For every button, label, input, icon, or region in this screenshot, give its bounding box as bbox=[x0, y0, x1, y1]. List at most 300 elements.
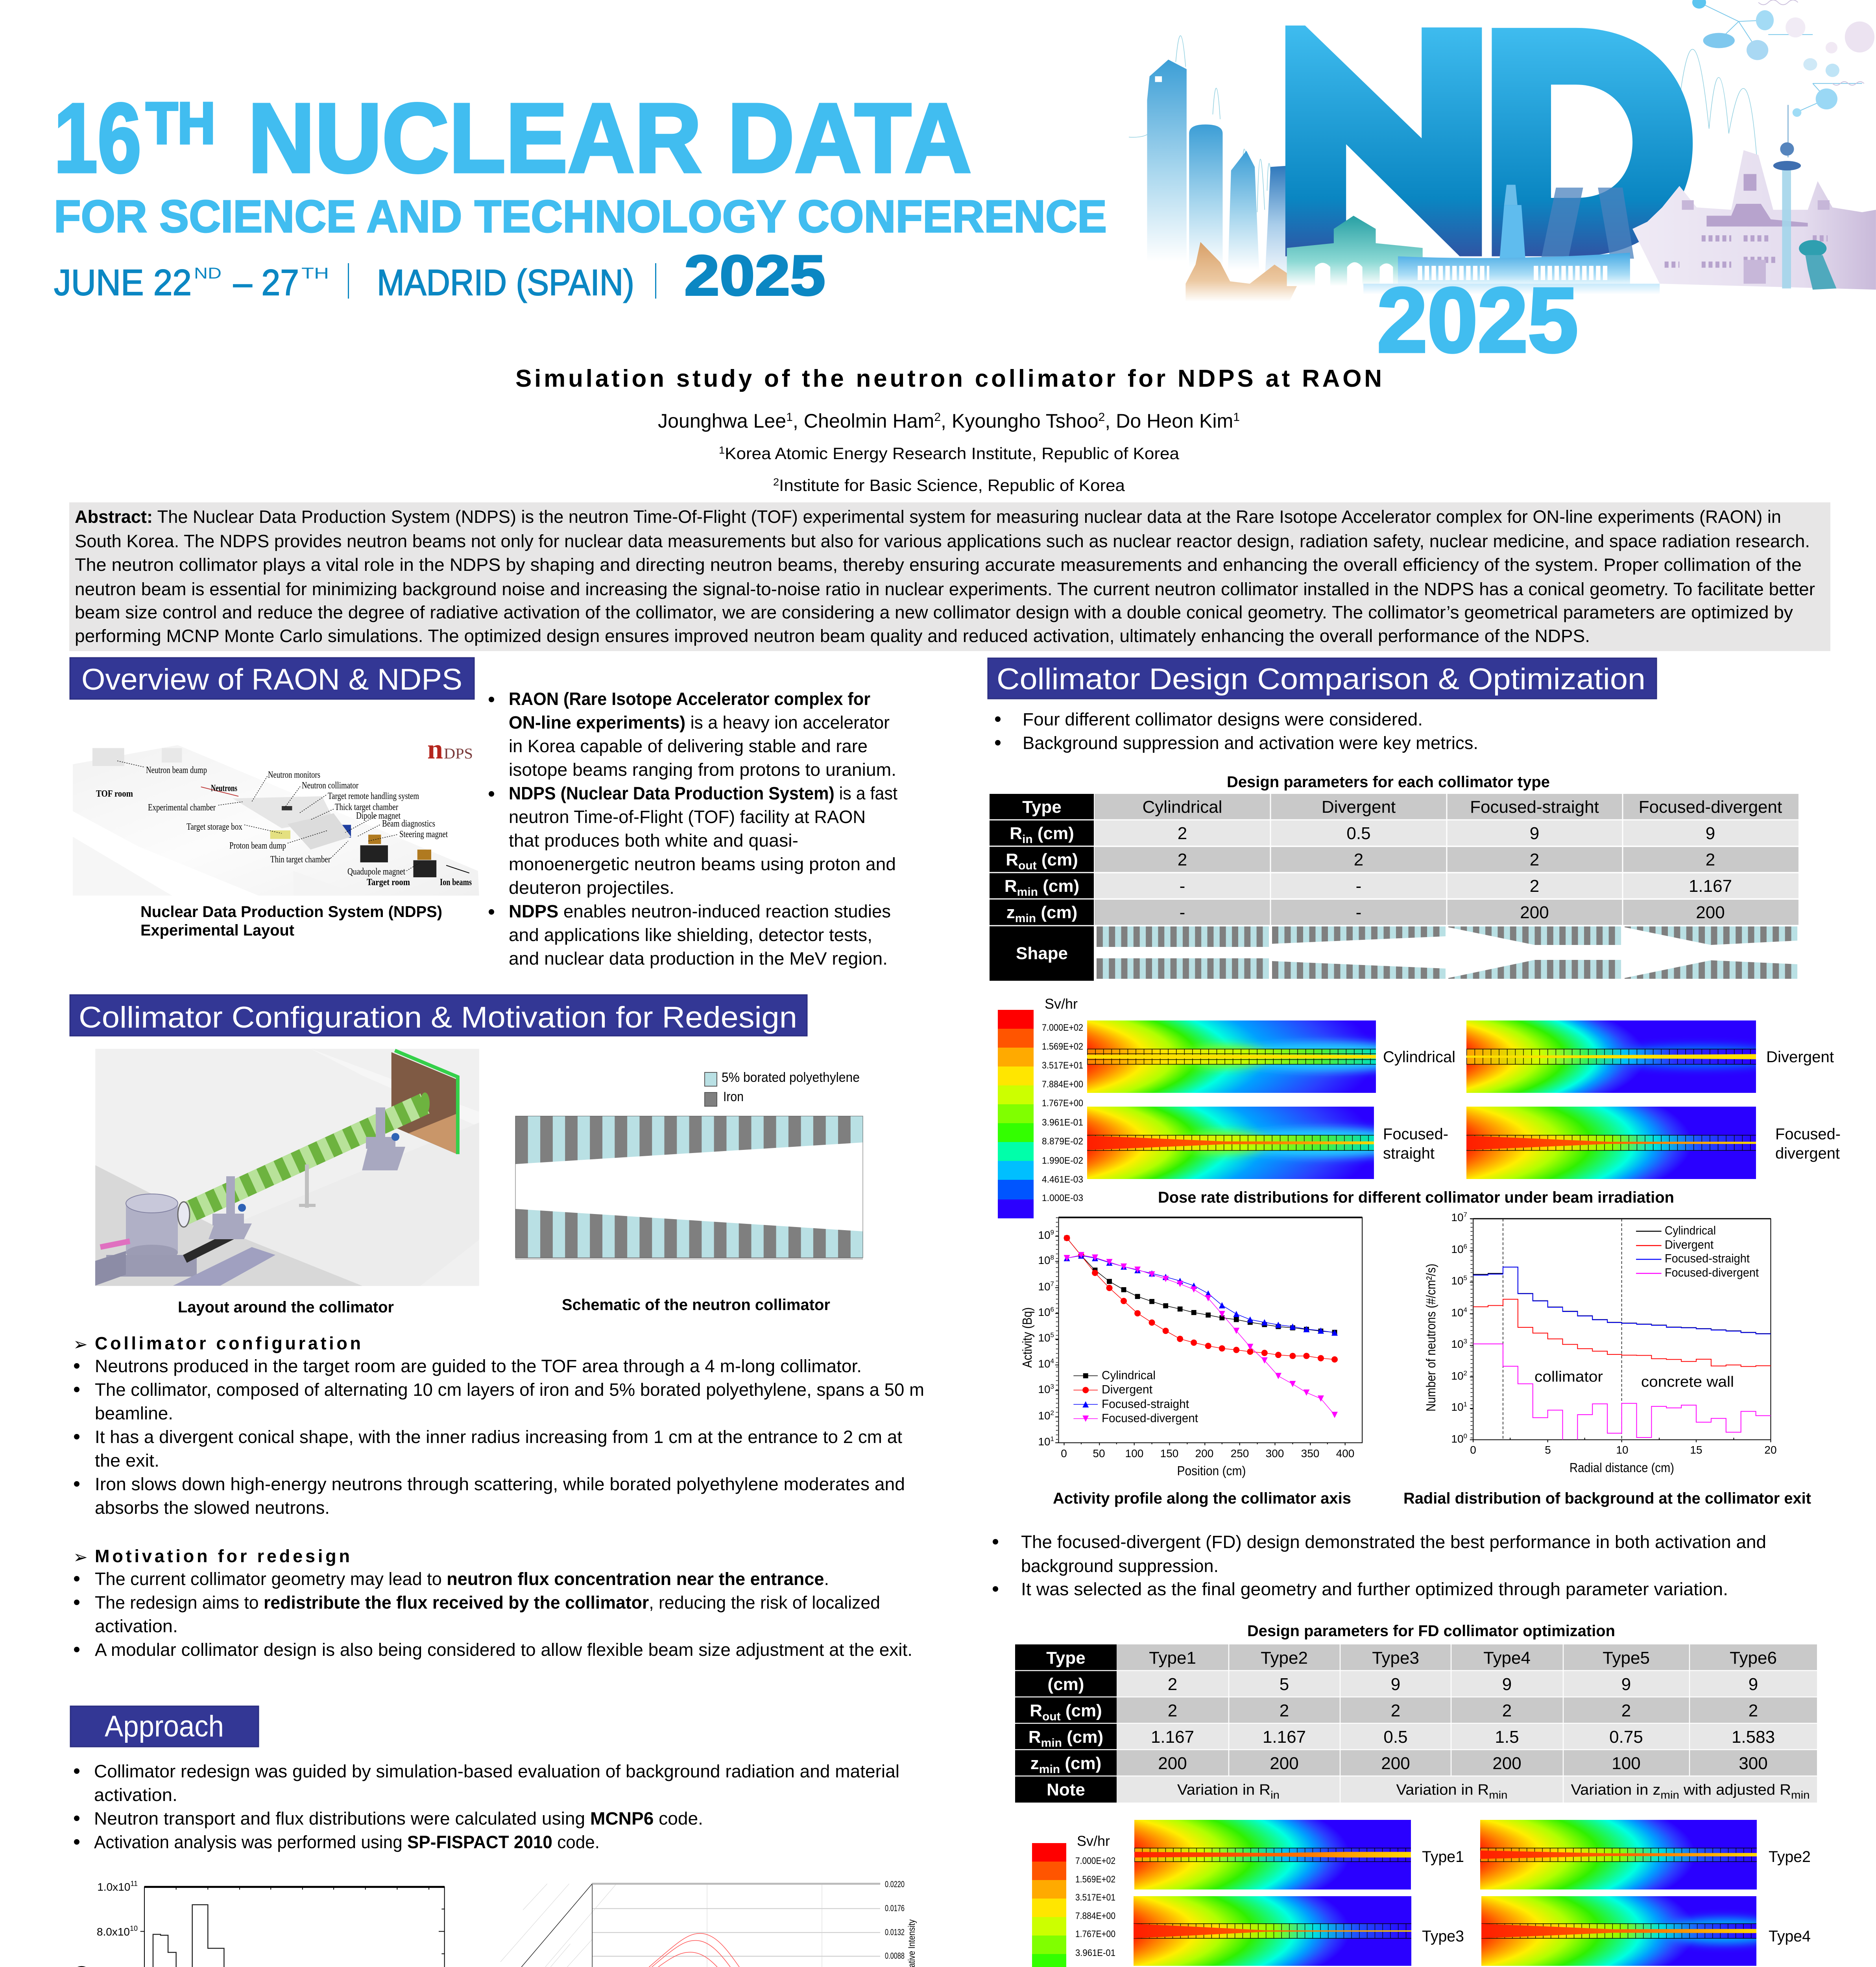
legend and axis labels: Activity (Bq) bbox=[1020, 1307, 1034, 1368]
table: design parameters for each collimator type: 9 bbox=[1706, 824, 1715, 843]
table: design parameters for each collimator type: Focused-straight bbox=[1470, 797, 1599, 817]
authors: 2 bbox=[1099, 411, 1105, 424]
legend and axis labels: Cylindrical bbox=[1102, 1368, 1156, 1382]
text block: RAON and NDPS bullets: deuteron projectiles. bbox=[509, 878, 674, 898]
figure: NDPS experimental layout: Proton beam dump bbox=[229, 841, 286, 851]
legend and axis labels bbox=[1424, 1211, 1777, 1475]
table: design parameters for FD collimator optimization: 1.583 bbox=[1732, 1727, 1775, 1747]
color scale: dose rate 1: 7.000E+02 bbox=[1042, 1022, 1083, 1033]
legend and axis labels: Divergent bbox=[1665, 1238, 1714, 1251]
legend and axis labels: 10 bbox=[1038, 1383, 1051, 1395]
text block: collimator configuration: absorbs the slowed neutrons. bbox=[95, 1498, 330, 1518]
icon: Torrespana tower bbox=[1773, 105, 1801, 288]
subheading: collimator configuration: ➢ bbox=[73, 1334, 88, 1354]
label: focused-straight bbox=[1383, 1126, 1448, 1162]
table: design parameters for FD collimator optimization: 2 bbox=[1391, 1701, 1400, 1720]
table: design parameters for FD collimator optimization: 300 bbox=[1739, 1754, 1768, 1773]
caption: dose rate 1: Dose rate distributions for different collimator under beam irradiation bbox=[1158, 1189, 1674, 1206]
table: design parameters for FD collimator optimization: (cm) bbox=[1061, 1701, 1102, 1720]
text block: RAON and NDPS bullets: that produces both white and quasi- bbox=[509, 830, 798, 851]
text block: motivation for redesign: activation. bbox=[95, 1616, 178, 1636]
legend and axis labels: 50 bbox=[1093, 1447, 1105, 1460]
text block: motivation for redesign bbox=[73, 1546, 912, 1660]
subheading: collimator configuration: Collimator configuration bbox=[95, 1333, 361, 1353]
caption: NDPS layout bbox=[140, 903, 442, 939]
legend and axis labels: 0 bbox=[1470, 1444, 1476, 1456]
legend and axis labels: 10 bbox=[1038, 1254, 1051, 1266]
table: design parameters for FD collimator optimization: Variation in z bbox=[1571, 1782, 1656, 1798]
legend and axis labels: 10 bbox=[1451, 1433, 1464, 1445]
table: design parameters for FD collimator optimization: min bbox=[1039, 1763, 1060, 1776]
axis labels: 0.0176 bbox=[885, 1903, 905, 1913]
table: design parameters for FD collimator optimization: Type3 bbox=[1372, 1648, 1419, 1668]
legend and axis labels: 7 bbox=[1051, 1280, 1054, 1288]
color scale: dose rate 1: 1.000E-03 bbox=[1042, 1193, 1083, 1203]
legend and axis labels: 3 bbox=[1051, 1383, 1054, 1390]
text block: focused-divergent selection bullets: The focused-divergent (FD) design demonstrated the best performance in both activation and bbox=[1021, 1532, 1766, 1552]
table: design parameters for FD collimator optimization: in bbox=[1270, 1789, 1280, 1801]
legend and axis labels: 0 bbox=[1464, 1432, 1467, 1440]
legend and axis labels: 4 bbox=[1051, 1357, 1054, 1365]
table: design parameters for each collimator type: min bbox=[1017, 886, 1038, 899]
table: design parameters for FD collimator optimization: min bbox=[1791, 1789, 1810, 1801]
table: design parameters for each collimator type: Shape bbox=[1016, 944, 1068, 963]
text block: RAON and NDPS bullets: RAON (Rare Isotope Accelerator complex for bbox=[509, 689, 870, 709]
text block: RAON and NDPS bullets: NDPS (Nuclear Data Production System) is a fast bbox=[509, 783, 897, 803]
heatmap: type 1 bbox=[1134, 1820, 1411, 1890]
legend and axis labels: 10 bbox=[1038, 1358, 1051, 1370]
label: focused-straight: Focused- bbox=[1383, 1126, 1448, 1143]
icon: Cibeles fountain sculpture bbox=[1185, 242, 1299, 302]
legend and axis labels bbox=[1020, 1229, 1354, 1478]
color scale: dose rate 2: 1.569E+02 bbox=[1075, 1874, 1115, 1885]
conference title line 1: NUCLEAR DATA bbox=[248, 83, 971, 193]
affiliation 1: Korea Atomic Energy Research Institute, Republic of Korea bbox=[725, 444, 1180, 463]
text block: motivation for redesign: The redesign aims to redistribute the flux received by the collimator, reducing the risk of localized bbox=[95, 1592, 880, 1613]
chart: angular distribution of the neutron intensity bbox=[73, 1880, 445, 1967]
table: design parameters for FD collimator optimization bbox=[1015, 1644, 1817, 1803]
legend and axis labels: 10 bbox=[1451, 1211, 1464, 1223]
table: design parameters for FD collimator optimization: with adjusted R bbox=[1679, 1782, 1791, 1798]
table: design parameters for FD collimator optimization: 0.75 bbox=[1609, 1727, 1643, 1747]
caption: radial distribution 1: Radial distribution of background at the collimator exit bbox=[1403, 1490, 1811, 1507]
text block: collimator configuration: Iron slows down high-energy neutrons through scattering, while borated polyethylene moderates and bbox=[95, 1474, 905, 1494]
figure: NDPS experimental layout: Thin target chamber bbox=[270, 854, 331, 865]
text block: RAON and NDPS bullets: and applications like shielding, detector tests, bbox=[509, 925, 872, 945]
caption: NDPS layout: Nuclear Data Production System (NDPS) bbox=[140, 903, 442, 921]
legend: Iron bbox=[723, 1089, 744, 1104]
table: design parameters for FD collimator optimization: Type5 bbox=[1603, 1648, 1650, 1668]
axis labels: 0.0220 bbox=[885, 1879, 905, 1889]
panel: abstract: beam size control and reduce the degree of radiative activation of the collimator, we are considering a new collimator design with a double conical geometry. The collimator’s geometrical parameters are optimized by bbox=[75, 602, 1793, 622]
poster title: Simulation study of the neutron collimator for NDPS at RAON bbox=[515, 365, 1382, 392]
conference title line 1: 16 bbox=[54, 83, 141, 193]
table: design parameters for FD collimator optimization: 9 bbox=[1621, 1675, 1631, 1694]
legend and axis labels: 0 bbox=[1061, 1447, 1067, 1460]
axis labels: 0.0088 bbox=[885, 1951, 905, 1961]
authors: , Kyoungho Tshoo bbox=[941, 410, 1099, 432]
label: focused-straight: straight bbox=[1383, 1145, 1435, 1162]
table: design parameters for FD collimator optimization: Type4 bbox=[1483, 1648, 1531, 1668]
date and place line: MADRID (SPAIN) bbox=[377, 262, 634, 303]
heatmap: cylindrical bbox=[1087, 1020, 1428, 1093]
legend and axis labels: 400 bbox=[1336, 1447, 1354, 1460]
chart: radial distribution of background bbox=[1424, 1211, 1777, 1475]
table: design parameters for each collimator type: R bbox=[1006, 850, 1018, 869]
panel: abstract: Abstract: The Nuclear Data Production System (NDPS) is the neutron Time-Of-Flight (TOF) experimental system for measuring nuclear data at the Rare Isotope Accelerator complex for ON-line experiments (RAON) in bbox=[75, 507, 1781, 527]
icon: NDPS logo: DPS bbox=[444, 745, 473, 762]
legend and axis labels: Position (cm) bbox=[1177, 1463, 1246, 1478]
legend and axis labels: 100 bbox=[1125, 1447, 1143, 1460]
thin wave lines bbox=[1129, 36, 1758, 212]
legend and axis labels: 1 bbox=[1464, 1401, 1467, 1408]
panel: abstract: neutron beam is essential for minimizing background noise and increasing the signal-to-noise ratio in nuclear experiments. The current neutron collimator installed in the NDPS has a conical geometry. To facilitate better bbox=[75, 579, 1815, 599]
caption: NDPS layout: Experimental Layout bbox=[140, 922, 294, 939]
table: design parameters for FD collimator optimization: 200 bbox=[1381, 1754, 1410, 1773]
table: design parameters for FD collimator optimization: Type2 bbox=[1261, 1648, 1308, 1668]
table: design parameters for each collimator type: 1.167 bbox=[1689, 876, 1732, 896]
text block: approach bullets: Activation analysis was performed using SP-FISPACT 2010 code. bbox=[94, 1832, 600, 1852]
table: design parameters for FD collimator optimization: 9 bbox=[1749, 1675, 1758, 1694]
icon: Kio towers bbox=[1541, 188, 1634, 259]
table: design parameters for FD collimator optimization: Type6 bbox=[1730, 1648, 1777, 1668]
label: divergent: Divergent bbox=[1766, 1048, 1834, 1066]
label: focused-divergent: divergent bbox=[1775, 1145, 1840, 1162]
text block: RAON and NDPS bullets: in Korea capable of delivering stable and rare bbox=[509, 736, 868, 756]
conference logo with ND letters and Madrid skyline bbox=[1129, 0, 1876, 371]
shape: divergent bbox=[1272, 926, 1446, 979]
legend and axis labels: Focused-straight bbox=[1665, 1251, 1750, 1265]
heading: Approach bbox=[70, 1706, 259, 1747]
table: design parameters for each collimator type: R bbox=[1004, 876, 1017, 896]
legend and axis labels: 10 bbox=[1616, 1444, 1629, 1456]
figure: NDPS experimental layout: Dipole magnet bbox=[356, 811, 401, 821]
caption: activity profile 1: Activity profile along the collimator axis bbox=[1053, 1490, 1351, 1507]
heading: Approach: Approach bbox=[105, 1710, 224, 1743]
table: design parameters for FD collimator optimization: z bbox=[1030, 1754, 1039, 1773]
legend and axis labels: 10 bbox=[1038, 1332, 1051, 1344]
text block: RAON and NDPS bullets: monoenergetic neutron beams using proton and bbox=[509, 854, 896, 874]
shape: cylindrical bbox=[1097, 926, 1269, 979]
color scale: dose rate 2 bbox=[1032, 1833, 1115, 1967]
panel: abstract bbox=[69, 502, 1830, 651]
icon: Puerta de Alcala arch bbox=[1287, 216, 1423, 286]
table: design parameters for each collimator type: Cylindrical bbox=[1143, 797, 1222, 817]
table: design parameters for FD collimator optimization: 1.5 bbox=[1495, 1727, 1519, 1747]
subheading: motivation for redesign: ➢ bbox=[73, 1547, 88, 1567]
logo year 2025: 2025 bbox=[1377, 269, 1578, 371]
color scale: dose rate 2: 3.517E+01 bbox=[1075, 1892, 1115, 1903]
table: design parameters for each collimator type bbox=[990, 794, 1798, 981]
table: design parameters for each collimator type: - bbox=[1180, 876, 1185, 896]
color scale: dose rate 2: 1.767E+00 bbox=[1075, 1929, 1115, 1939]
caption: design parameters table: Design parameters for each collimator type bbox=[1227, 773, 1550, 791]
chart: neutron energy spectra at different emission angles bbox=[498, 1879, 917, 1967]
legend and axis labels: 10 bbox=[1038, 1410, 1051, 1422]
text block: focused-divergent selection bullets bbox=[993, 1532, 1766, 1599]
table: design parameters for each collimator type: out bbox=[1018, 859, 1037, 872]
heatmap: divergent bbox=[1466, 1020, 1785, 1093]
caption: schematic: Schematic of the neutron collimator bbox=[562, 1296, 830, 1314]
legend: 5% borated polyethylene bbox=[722, 1070, 860, 1085]
text block: RAON and NDPS bullets: NDPS enables neutron-induced reaction studies bbox=[509, 901, 891, 921]
legend and axis labels: 10 bbox=[1451, 1243, 1464, 1255]
legend and axis labels: 2 bbox=[1464, 1369, 1467, 1377]
table: design parameters for each collimator type: (cm) bbox=[1038, 876, 1079, 896]
legend and axis labels: 10 bbox=[1451, 1306, 1464, 1319]
legend and axis labels: 8 bbox=[1051, 1254, 1054, 1261]
color scale: dose rate 1: 3.517E+01 bbox=[1042, 1060, 1083, 1071]
shape: focused-divergent bbox=[1625, 926, 1797, 979]
text block: motivation for redesign: The current collimator geometry may lead to neutron flux concentration near the entrance. bbox=[95, 1569, 829, 1589]
table: design parameters for FD collimator optimization: (cm) bbox=[1048, 1675, 1084, 1694]
table: design parameters for each collimator type: 200 bbox=[1696, 903, 1725, 922]
caption: layout around the collimator: Layout around the collimator bbox=[178, 1299, 394, 1316]
text block: approach bullets bbox=[74, 1761, 899, 1852]
heatmap: focused-divergent bbox=[1466, 1107, 1756, 1179]
label: type 4: Type4 bbox=[1769, 1928, 1811, 1945]
date and place line: – 27 bbox=[233, 262, 299, 303]
legend and axis labels: 300 bbox=[1266, 1447, 1284, 1460]
figure: NDPS experimental layout: Neutrons bbox=[211, 783, 237, 793]
table: design parameters for each collimator type: (cm) bbox=[1033, 824, 1074, 843]
text block: collimator configuration: Neutrons produced in the target room are guided to the TOF area through a 4 m-long collimator. bbox=[95, 1356, 862, 1376]
heatmap: type 4 bbox=[1481, 1896, 1784, 1966]
color scale: dose rate 1: 7.884E+00 bbox=[1042, 1079, 1083, 1090]
figure: NDPS experimental layout: Experimental chamber bbox=[148, 803, 216, 813]
legend and axis labels: 10 bbox=[1038, 1281, 1051, 1293]
figure: NDPS experimental layout: Steering magnet bbox=[399, 829, 448, 840]
table: design parameters for FD collimator optimization: (cm) bbox=[1060, 1754, 1101, 1773]
table: design parameters for FD collimator optimization: min bbox=[1041, 1736, 1062, 1749]
text block: approach bullets: Collimator redesign was guided by simulation-based evaluation of background radiation and material bbox=[94, 1761, 899, 1781]
legend and axis labels: 15 bbox=[1690, 1444, 1702, 1456]
table: design parameters for each collimator type: 200 bbox=[1520, 903, 1549, 922]
color scale: dose rate 1: 1.990E-02 bbox=[1042, 1155, 1083, 1166]
text block: RAON and NDPS bullets: and nuclear data production in the MeV region. bbox=[509, 948, 888, 969]
table: design parameters for FD collimator optimization: 2 bbox=[1280, 1701, 1289, 1720]
figure: NDPS experimental layout: Neutron collimator bbox=[302, 781, 358, 791]
table: design parameters for FD collimator optimization: 200 bbox=[1492, 1754, 1521, 1773]
label: type 1: Type1 bbox=[1422, 1848, 1464, 1866]
heading: Collimator Configuration and Motivation: Collimator Configuration & Motivation for Redesign bbox=[79, 1001, 797, 1034]
color scale: dose rate 1: 1.767E+00 bbox=[1042, 1098, 1083, 1109]
text block: design comparison bullets bbox=[995, 709, 1478, 753]
icon: NDPS logo: n bbox=[427, 733, 443, 765]
color scale: dose rate 2: Sv/hr bbox=[1077, 1833, 1110, 1849]
legend and axis labels: collimator bbox=[1534, 1369, 1603, 1385]
text block: focused-divergent selection bullets: It was selected as the final geometry and further optimized through parameter variation. bbox=[1021, 1579, 1728, 1599]
affiliation 2: Institute for Basic Science, Republic of Korea bbox=[779, 476, 1125, 495]
table: design parameters for FD collimator optimization: Variation in R bbox=[1177, 1782, 1266, 1798]
figure: NDPS experimental layout: Target room bbox=[367, 877, 410, 888]
text block: RAON and NDPS bullets: isotope beams ranging from protons to uranium. bbox=[509, 760, 896, 780]
legend and axis labels: 200 bbox=[1195, 1447, 1213, 1460]
text block: RAON and NDPS bullets bbox=[489, 689, 897, 969]
shape: focused-straight bbox=[1448, 926, 1621, 979]
icon: pipe supports bbox=[209, 1107, 405, 1239]
figure: NDPS experimental layout: Thick target chamber bbox=[335, 802, 398, 812]
table: design parameters for FD collimator optimization: Note bbox=[1047, 1780, 1085, 1799]
text block: motivation for redesign: A modular collimator design is also being considered to allow flexible beam size adjustment at the exit. bbox=[95, 1640, 912, 1660]
legend and axis labels: 250 bbox=[1231, 1447, 1249, 1460]
table: design parameters for FD collimator optimization: 5 bbox=[1280, 1675, 1289, 1694]
legend and axis labels: 10 bbox=[1451, 1275, 1464, 1287]
color scale: dose rate 1: 1.569E+02 bbox=[1042, 1041, 1083, 1052]
table: design parameters for each collimator type: 2 bbox=[1178, 824, 1187, 843]
text block: design comparison bullets: Four different collimator designs were considered. bbox=[1023, 709, 1423, 729]
table: design parameters for FD collimator optimization: 200 bbox=[1270, 1754, 1299, 1773]
table: design parameters for each collimator type: 2 bbox=[1706, 850, 1715, 869]
table: design parameters for FD collimator optimization: 2 bbox=[1502, 1701, 1512, 1720]
icon: statue of the bear and strawberry tree bbox=[1799, 240, 1836, 290]
table: design parameters for each collimator type: 2 bbox=[1354, 850, 1363, 869]
legend and axis labels: 5 bbox=[1051, 1331, 1054, 1339]
table: design parameters for FD collimator optimization: Type bbox=[1046, 1648, 1086, 1668]
legend and axis labels: 10 bbox=[1451, 1370, 1464, 1382]
legend and axis labels: 20 bbox=[1764, 1444, 1777, 1456]
legend and axis labels: 10 bbox=[1038, 1306, 1051, 1318]
table: design parameters for FD collimator optimization: 9 bbox=[1391, 1675, 1400, 1694]
affiliation 2: 2 bbox=[773, 476, 779, 488]
figure: NDPS experimental layout: Target storage box bbox=[186, 822, 242, 832]
table: design parameters for each collimator type: (cm) bbox=[1036, 903, 1077, 922]
legend and axis labels: 1 bbox=[1051, 1435, 1054, 1443]
label: focused-divergent: Focused- bbox=[1775, 1126, 1841, 1143]
conference banner text bbox=[54, 83, 1107, 307]
color scale: dose rate 2: 7.000E+02 bbox=[1075, 1856, 1115, 1866]
figure: NDPS experimental layout: Target remote handling system bbox=[328, 791, 419, 801]
table: design parameters for each collimator type: 2 bbox=[1178, 850, 1187, 869]
text block: collimator configuration: the exit. bbox=[95, 1450, 159, 1471]
heatmap: type 2 bbox=[1480, 1820, 1757, 1890]
table: design parameters for each collimator type: - bbox=[1356, 903, 1361, 922]
table: design parameters for FD collimator optimization: 2 bbox=[1168, 1675, 1177, 1694]
icon: Cibeles palace bbox=[1632, 150, 1876, 290]
legend and axis labels: 5 bbox=[1464, 1274, 1467, 1282]
text block: collimator configuration bbox=[73, 1333, 924, 1518]
legend and axis labels: 6 bbox=[1464, 1243, 1467, 1250]
table: design parameters for each collimator type: - bbox=[1180, 903, 1185, 922]
table: design parameters for each collimator type: 2 bbox=[1530, 876, 1539, 896]
legend and axis labels: 10 bbox=[1038, 1436, 1051, 1448]
figure: NDPS experimental layout: TOF room bbox=[96, 789, 133, 799]
table: design parameters for FD collimator optimization: 1.167 bbox=[1151, 1727, 1194, 1747]
table: design parameters for FD collimator optimization: 200 bbox=[1158, 1754, 1187, 1773]
authors: , Cheolmin Ham bbox=[793, 410, 934, 432]
table: design parameters for FD collimator optimization: 1.167 bbox=[1263, 1727, 1306, 1747]
text block: collimator configuration: It has a divergent conical shape, with the inner radius increasing from 1 cm at the entrance to 2 cm at bbox=[95, 1427, 902, 1447]
table: design parameters for FD collimator optimization: Variation in R bbox=[1396, 1782, 1485, 1798]
label: type 3: Type3 bbox=[1422, 1928, 1464, 1945]
table: design parameters for each collimator type: (cm) bbox=[1037, 850, 1078, 869]
axis labels: 11 bbox=[130, 1880, 138, 1888]
authors: 1 bbox=[1233, 411, 1240, 424]
axis labels: 10 bbox=[130, 1925, 138, 1932]
text block: design comparison bullets: Background suppression and activation were key metrics. bbox=[1023, 733, 1478, 753]
authors: Jounghwa Lee bbox=[658, 410, 786, 432]
legend and axis labels: Cylindrical bbox=[1665, 1223, 1716, 1237]
table: design parameters for each collimator type: 2 bbox=[1530, 850, 1539, 869]
legend and axis labels: Number of neutrons (#/cm²/s) bbox=[1424, 1264, 1438, 1412]
panel: abstract: South Korea. The NDPS provides neutron beams not only for nuclear data measurements but also for various applications such as nuclear reactor design, radiation safety, nuclear medicine, and space radiation research. bbox=[75, 531, 1810, 551]
figure: schematic of the neutron collimator bbox=[515, 1070, 863, 1260]
table: design parameters for FD collimator optimization: 2 bbox=[1621, 1701, 1631, 1720]
table: design parameters for FD collimator optimization: min bbox=[1489, 1789, 1508, 1801]
table: design parameters for FD collimator optimization: 2 bbox=[1749, 1701, 1758, 1720]
icon: NDPS logo bbox=[427, 733, 473, 765]
date and place line: 2025 bbox=[684, 244, 825, 307]
legend and axis labels: Focused-straight bbox=[1102, 1397, 1189, 1411]
icon: Plaza de Espana colonnade bbox=[1363, 185, 1660, 294]
table: design parameters for FD collimator optimization: 0.5 bbox=[1383, 1727, 1408, 1747]
color scale: dose rate 1: Sv/hr bbox=[1045, 996, 1078, 1012]
legend and axis labels: Divergent bbox=[1102, 1382, 1152, 1396]
table: design parameters for FD collimator optimization: R bbox=[1030, 1701, 1042, 1720]
figure: NDPS experimental layout: Ion beams bbox=[440, 877, 472, 888]
table: design parameters for each collimator type: min bbox=[1015, 912, 1036, 925]
axis labels bbox=[498, 1879, 917, 1967]
text block: collimator configuration: beamline. bbox=[95, 1403, 173, 1423]
text block: focused-divergent selection bullets: background suppression. bbox=[1021, 1556, 1219, 1576]
subheading: motivation for redesign: Motivation for redesign bbox=[95, 1546, 350, 1566]
legend and axis labels: Focused-divergent bbox=[1102, 1411, 1198, 1425]
axis labels: 0.0132 bbox=[885, 1927, 905, 1937]
legend and axis labels: concrete wall bbox=[1641, 1374, 1734, 1390]
date and place line: JUNE 22 bbox=[54, 262, 192, 303]
authors: 2 bbox=[934, 411, 941, 424]
color scale: dose rate 1: 4.461E-03 bbox=[1042, 1174, 1083, 1185]
panel: abstract: performing MCNP Monte Carlo simulations. The optimized design ensures improved neutron beam quality and reduced activation, ultimately enhancing the overall performance of the NDPS. bbox=[75, 626, 1590, 646]
color scale: dose rate 2: 3.961E-01 bbox=[1075, 1948, 1115, 1958]
legend and axis labels: Radial distance (cm) bbox=[1569, 1460, 1674, 1475]
table: design parameters for FD collimator optimization: 9 bbox=[1502, 1675, 1512, 1694]
table: design parameters for each collimator type: - bbox=[1356, 876, 1361, 896]
icon: skyscraper towers bbox=[1147, 60, 1292, 284]
legend and axis labels: 10 bbox=[1451, 1338, 1464, 1350]
legend and axis labels: 4 bbox=[1464, 1306, 1467, 1314]
table: design parameters for FD collimator optimization: R bbox=[1028, 1727, 1041, 1747]
icon: molecule cluster bbox=[1692, 0, 1874, 117]
legend and axis labels: 350 bbox=[1301, 1447, 1319, 1460]
ND letters bbox=[1285, 26, 1693, 256]
icon: vacuum chamber bbox=[95, 1194, 275, 1286]
legend bbox=[705, 1070, 860, 1106]
axis labels: 8.0x10 bbox=[97, 1926, 130, 1938]
authors: 1 bbox=[786, 411, 793, 424]
legend and axis labels: 9 bbox=[1051, 1229, 1054, 1236]
table: design parameters for FD collimator optimization: 100 bbox=[1612, 1754, 1641, 1773]
text block: approach bullets: activation. bbox=[94, 1785, 177, 1805]
table: design parameters for FD collimator optimization: Type1 bbox=[1149, 1648, 1196, 1668]
table: design parameters for each collimator type: R bbox=[1010, 824, 1022, 843]
authors: , Do Heon Kim bbox=[1105, 410, 1233, 432]
table: design parameters for each collimator type: Type bbox=[1022, 797, 1062, 817]
panel: abstract: The neutron collimator plays a vital role in the NDPS by shaping and directing neutron beams, thereby ensuring accurate measurements and enhancing the overall efficiency of the system. Proper collimation of the bbox=[75, 555, 1802, 575]
date and place line: ND bbox=[194, 265, 222, 282]
figure: NDPS experimental layout bbox=[73, 733, 479, 896]
label: type 2: Type2 bbox=[1769, 1848, 1811, 1866]
heatmap: type 3 bbox=[1134, 1896, 1411, 1966]
legend and axis labels: 10 bbox=[1451, 1401, 1464, 1413]
date and place line: TH bbox=[301, 265, 329, 282]
legend and axis labels: 6 bbox=[1051, 1306, 1054, 1313]
table: design parameters for FD collimator optimization: (cm) bbox=[1062, 1727, 1103, 1747]
figure: NDPS experimental layout: Quadupole magnet bbox=[347, 867, 405, 877]
figure: layout around the collimator bbox=[95, 1049, 479, 1286]
color scale: dose rate 2: 7.884E+00 bbox=[1075, 1911, 1115, 1921]
heading: Overview of RAON and NDPS: Overview of RAON & NDPS bbox=[81, 663, 462, 696]
